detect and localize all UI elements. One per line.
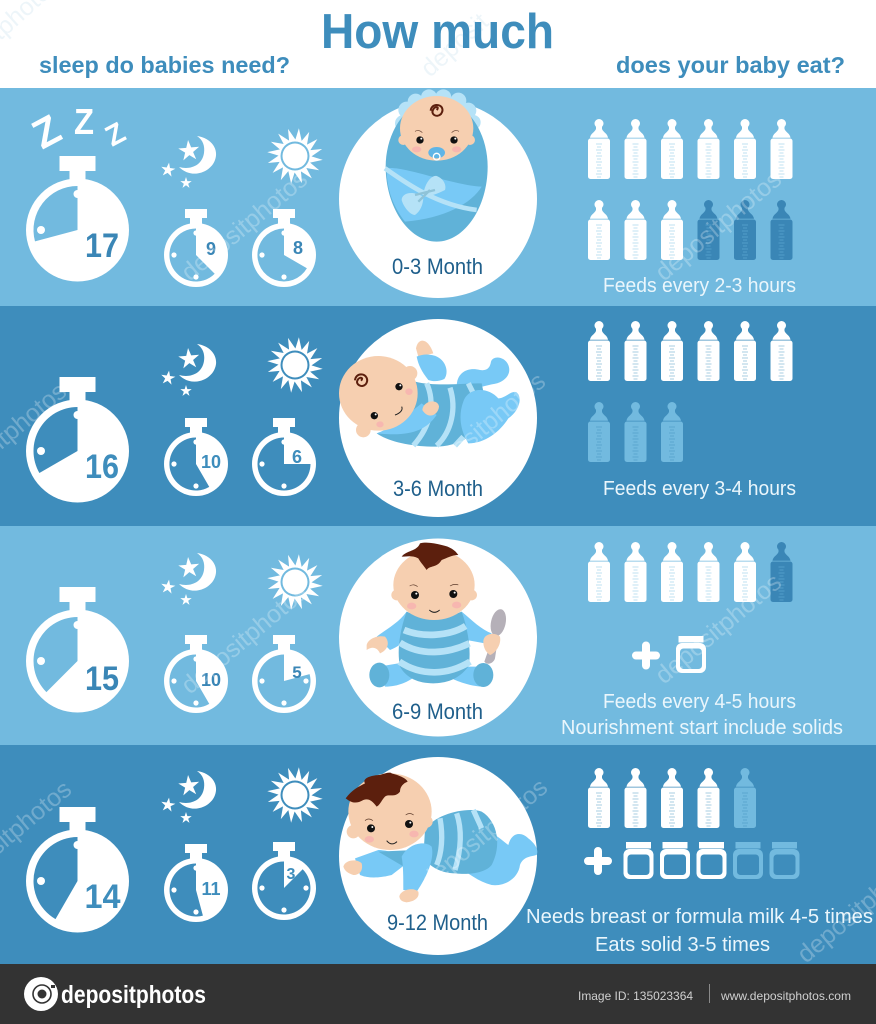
clock: 16 hours total xyxy=(26,377,129,502)
label: age: 6-9 Month xyxy=(392,699,483,724)
watermarks: depositphotos xyxy=(650,165,787,287)
clock: 9 hours night xyxy=(164,209,228,287)
icon: plus xyxy=(636,646,656,666)
footer logo text: depositphotos xyxy=(61,981,206,1009)
clock: 3 hours day: 3 xyxy=(287,866,296,883)
text: feeding note xyxy=(561,691,843,739)
clock: 10 hours night xyxy=(164,635,228,713)
icon: sun xyxy=(263,333,327,397)
icon: moon xyxy=(160,136,216,188)
baby: crawling xyxy=(343,773,537,902)
clock: 17 hours total xyxy=(26,156,129,282)
clock: 11 hours night xyxy=(164,844,228,922)
circle: baby backdrop xyxy=(339,100,537,298)
panel: 6-9 month xyxy=(0,526,876,745)
label: age: 9-12 Month xyxy=(387,910,488,935)
clock: 3 hours day xyxy=(252,842,316,920)
zzz icon xyxy=(25,101,131,158)
clock: 16 hours total: 16 xyxy=(85,448,119,486)
icon: sun xyxy=(263,763,327,827)
icons: jars xyxy=(624,842,800,879)
text: feeding note xyxy=(526,906,873,956)
clock: 15 hours total: 15 xyxy=(85,660,119,698)
watermarks: depositphotos xyxy=(176,165,313,287)
text: feeding note: Nourishment start include solids xyxy=(561,717,843,739)
clock: 14 hours total: 14 xyxy=(84,878,121,916)
text: feeding note: Eats solid 3-5 times xyxy=(595,934,770,956)
icon: moon xyxy=(160,771,216,823)
clock: 10 hours night: 10 xyxy=(201,452,221,472)
baby: swaddled newborn xyxy=(385,89,488,242)
baby: lying on back xyxy=(339,341,520,447)
heading: eat: does your baby eat? xyxy=(616,52,845,78)
clock: 10 hours night: 10 xyxy=(201,670,221,690)
heading: sleep: sleep do babies need? xyxy=(39,52,290,78)
clock: 6 hours day xyxy=(252,418,316,496)
watermarks: depositphotos xyxy=(416,773,553,895)
baby: sitting with spoon xyxy=(367,543,508,687)
clock: 8 hours day: 8 xyxy=(293,238,303,258)
watermarks: deposit xyxy=(415,8,494,82)
zzz icon: Z xyxy=(25,106,68,158)
icon: moon xyxy=(160,344,216,396)
clock: 9 hours night: 9 xyxy=(206,239,216,259)
panel: 3-6 month xyxy=(0,306,876,526)
clock: 11 hours night: 11 xyxy=(201,879,221,899)
clock: 10 hours night xyxy=(164,418,228,496)
clock: 6 hours day: 6 xyxy=(292,447,302,467)
clock: 17 hours total: 17 xyxy=(85,227,119,265)
image id: Image ID: 135023364 xyxy=(578,989,693,1003)
clock: 8 hours day xyxy=(252,209,316,287)
watermarks: depositphotos xyxy=(176,578,313,700)
panel: 0-3 month xyxy=(0,88,876,306)
zzz icon: Z xyxy=(100,117,131,153)
bottles: feeds xyxy=(588,119,792,260)
footer bar xyxy=(0,964,876,1024)
text: feeding note: Feeds every 2-3 hours xyxy=(603,275,796,297)
icon: plus xyxy=(588,851,608,871)
text: feeding note: Feeds every 3-4 hours xyxy=(603,478,796,500)
icon: moon xyxy=(160,553,216,605)
icon: sun xyxy=(263,550,327,614)
title: How much xyxy=(321,5,554,59)
bottles: feeds xyxy=(588,768,756,828)
bottles: feeds xyxy=(588,542,792,602)
text: feeding note: Feeds every 4-5 hours xyxy=(603,691,796,713)
clock: 15 hours total xyxy=(26,587,129,712)
watermarks: depositphotos xyxy=(414,367,551,489)
watermarks: depositphotos xyxy=(650,568,787,690)
panel: 9-12 month xyxy=(0,745,876,964)
zzz icon: Z xyxy=(74,101,94,142)
icon: sun xyxy=(263,124,327,188)
icon: jar xyxy=(676,636,706,673)
text: feeding note: Needs breast or formula milk 4-5 times xyxy=(526,906,873,928)
circle: baby backdrop xyxy=(339,538,537,736)
footer logo icon xyxy=(24,977,58,1011)
footer divider xyxy=(709,984,710,1003)
clock: 5 hours day: 5 xyxy=(292,663,302,682)
bottles: feeds xyxy=(588,321,792,462)
label: age: 0-3 Month xyxy=(392,254,483,279)
clock: 14 hours total xyxy=(26,807,129,932)
circle: baby backdrop xyxy=(339,319,537,517)
circle: baby backdrop xyxy=(339,757,537,955)
label: age: 3-6 Month xyxy=(393,476,483,501)
clock: 5 hours day xyxy=(252,635,316,713)
website: www.depositphotos.com xyxy=(720,989,851,1003)
